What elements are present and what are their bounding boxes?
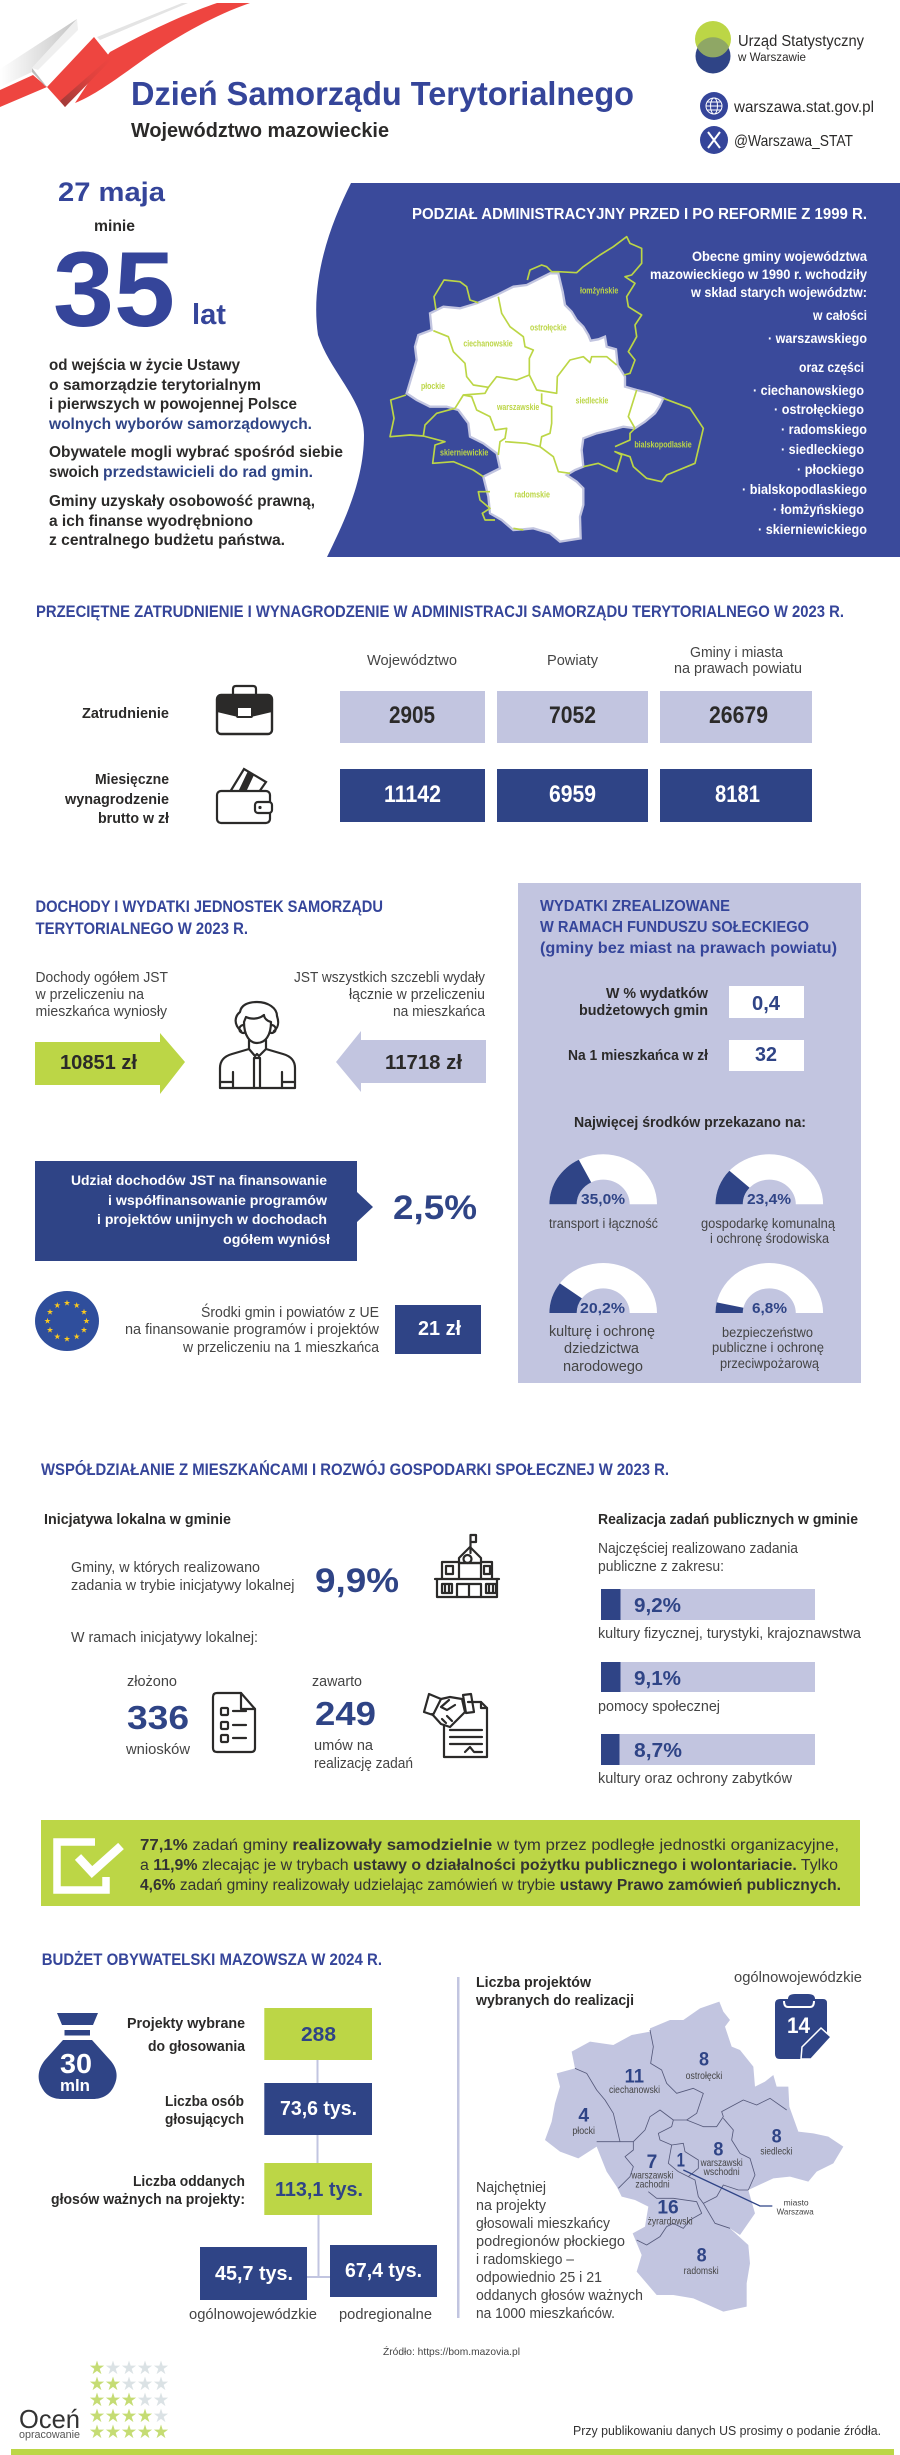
bar: culture and monuments (598, 1734, 815, 1787)
budget flow labels: Projekty wybrane (127, 2016, 245, 2032)
text: most active voters: i radomskiego – (476, 2251, 575, 2268)
map: voivodeship before and after the reform: płockie (421, 381, 445, 391)
rate this publication (19, 2360, 168, 2441)
map: projects by subregion: żyrardowski (648, 2216, 693, 2227)
value: 21 zł (395, 1305, 481, 1354)
list of former voivodeships: · bialskopodlaskiego (742, 481, 867, 497)
text: expenditure per capita (294, 970, 486, 1020)
stat: contracts: 249 (315, 1695, 376, 1732)
fund indicators: budżetowych gmin (579, 1003, 708, 1019)
intro block: 27 maja, 35 lat: 27 maja (58, 177, 166, 207)
list of former voivodeships: Obecne gminy województwa (692, 248, 867, 264)
employment table: 8181 (715, 781, 760, 808)
map: projects by subregion (545, 2002, 843, 2312)
gauge: transport (549, 1154, 658, 1231)
section heading: citizens budget: BUDŻET OBYWATELSKI MAZOWSZA W 2024 R. (42, 1950, 382, 1969)
text: most active voters: głosowali mieszkańcy (476, 2215, 610, 2232)
icon: clipboard 14: 14 (787, 2013, 811, 2038)
text: income per capita: w przeliczeniu na (35, 987, 145, 1003)
map: voivodeship before and after the reform: ostrołęckie (530, 323, 567, 333)
gauge: public safety: przeciwpożarową (720, 1356, 819, 1371)
list of former voivodeships: · ciechanowskiego (753, 382, 864, 398)
budget flow chart: 45,7 tys. (215, 2263, 293, 2285)
list of former voivodeships: · płockiego (797, 461, 864, 477)
gauge: transport: transport i łączność (549, 1216, 658, 1231)
value: 2,5%: 2,5% (393, 1189, 477, 1227)
rate this publication: Oceń (19, 2404, 80, 2434)
bar: social assistance: 9,1% (634, 1668, 681, 1690)
text: municipalities with local initiative (71, 1560, 294, 1594)
panel heading: (gminy bez miast na prawach powiatu) (540, 940, 837, 957)
budget flow labels: Liczba oddanych (133, 2174, 245, 2190)
gauge: public safety: publiczne i ochronę (712, 1340, 824, 1355)
employment table: 11142 (384, 781, 441, 808)
stat: applications (125, 1674, 191, 1758)
row labels: Miesięczne (95, 771, 169, 788)
map: projects by subregion: Warszawa (777, 2207, 814, 2217)
website contact: warszawa.stat.gov.pl (733, 99, 874, 116)
map: voivodeship before and after the reform (390, 237, 703, 542)
gauge: municipal economy: gospodarkę komunalną (701, 1216, 835, 1231)
panel: sołecki fund (518, 883, 861, 1383)
bar: physical culture: kultury fizycznej, turystyki, krajoznawstwa (598, 1626, 862, 1642)
gauge: municipal economy: 23,4% (747, 1191, 791, 1208)
intro text: i pierwszych w powojennej Polsce (49, 396, 297, 413)
map: projects by subregion: 8 (772, 2127, 782, 2148)
X contact: @Warszawa_STAT (734, 133, 853, 150)
callout: task execution (41, 1820, 860, 1906)
rate this publication: opracowanie (19, 2429, 80, 2441)
divider with projects heading (457, 1975, 634, 2318)
icon: money bag 30 mln: 30 (60, 2048, 92, 2079)
employment table: 6959 (549, 781, 596, 808)
list of former voivodeships: · ostrołęckiego (774, 401, 864, 417)
intro text (48, 357, 343, 549)
title: Dzień Samorządu Terytorialnego (131, 75, 634, 112)
row labels (64, 705, 170, 827)
intro text: z centralnego budżetu państwa. (49, 532, 285, 549)
intro text: wolnych wyborów samorządowych. (48, 416, 312, 433)
budget flow chart: 113,1 tys. (275, 2179, 363, 2201)
icon: EU flag (35, 1291, 99, 1351)
panel heading: W RAMACH FUNDUSZU SOŁECKIEGO (540, 919, 809, 936)
list of former voivodeships: · radomskiego (781, 421, 867, 437)
bar: culture and monuments: 8,7% (634, 1740, 682, 1762)
map: projects by subregion: warszawski (700, 2158, 743, 2169)
map: voivodeship before and after the reform: skierniewickie (440, 447, 488, 457)
intro block: 27 maja, 35 lat: 35 (53, 229, 175, 349)
stat: contracts: zawarto (312, 1674, 362, 1690)
section heading: income and expenditure: DOCHODY I WYDATKI JEDNOSTEK SAMORZĄDU (36, 898, 383, 916)
text: expenditure per capita: łącznie w przeliczeniu (349, 987, 485, 1003)
gauge: transport: 35,0% (581, 1191, 625, 1208)
text: income per capita (35, 970, 168, 1020)
text: municipalities with local initiative: zadania w trybie inicjatywy lokalnej (71, 1578, 294, 1594)
map: projects by subregion: ciechanowski (609, 2085, 660, 2096)
row labels: brutto w zł (98, 810, 170, 827)
budget flow chart: podregionalne (339, 2307, 432, 2323)
publication note: Przy publikowaniu danych US prosimy o podanie źródła. (573, 2423, 881, 2438)
fund indicators: 32 (755, 1044, 777, 1066)
text: income per capita: mieszkańca wyniosły (36, 1004, 168, 1020)
gauge: culture: narodowego (563, 1359, 643, 1375)
stat: contracts: realizację zadań (314, 1756, 413, 1772)
callout: task execution: 4,6% zadań gminy realizowały udzielając zamówień w trybie ustawy Prawo zamówień publicznych. (140, 1877, 841, 1894)
stat: contracts (312, 1674, 413, 1772)
icon: town hall (435, 1535, 499, 1597)
map: voivodeship before and after the reform: radomskie (514, 490, 550, 500)
map: projects by subregion: 1 (677, 2151, 685, 2172)
map: projects by subregion: 8 (699, 2050, 709, 2071)
intro block: 27 maja, 35 lat: minie (94, 218, 135, 235)
text: most active voters (476, 2179, 643, 2322)
bar: social assistance (598, 1662, 815, 1715)
bar: social assistance: pomocy społecznej (598, 1699, 720, 1715)
logo: Urząd Statystyczny: w Warszawie (737, 52, 806, 64)
list of former voivodeships: w skład starych województw: (690, 284, 867, 300)
text: most active voters: na projekty (476, 2197, 546, 2214)
section heading: income and expenditure: TERYTORIALNEGO W 2023 R. (36, 920, 248, 938)
callout: EU share: Udział dochodów JST na finansowanie (71, 1172, 327, 1188)
text: income per capita: Dochody ogółem JST (36, 970, 168, 986)
intro text: swoich (49, 464, 99, 481)
list of former voivodeships: · warszawskiego (768, 330, 867, 346)
gauge: culture: 20,2% (580, 1300, 625, 1317)
label: voivodeship-wide: ogólnowojewódzkie (734, 1970, 862, 1986)
X contact (700, 126, 853, 154)
gauge: culture: dziedzictwa (564, 1341, 640, 1357)
gauge: municipal economy (701, 1154, 835, 1246)
logo: Urząd Statystyczny: Urząd Statystyczny (738, 33, 864, 50)
map: projects by subregion: 16 (657, 2198, 679, 2219)
intro text: o samorządzie terytorialnym (49, 377, 261, 394)
intro block: 27 maja, 35 lat (53, 177, 226, 349)
gauge: public safety: 6,8% (752, 1300, 787, 1317)
arrow: expenditure (336, 1031, 486, 1092)
budget flow labels: Liczba osób (165, 2094, 244, 2110)
list of former voivodeships: mazowieckiego w 1990 r. wchodziły (650, 266, 867, 282)
map: projects by subregion: wschodni (703, 2167, 740, 2178)
icon: wallet (217, 769, 272, 823)
callout: task execution: 77,1% zadań gminy realizowały samodzielnie w tym przez podległe jednostki organizacyjne, (140, 1837, 839, 1854)
public tasks block (598, 1512, 862, 1787)
budget flow labels: głosujących (165, 2112, 244, 2128)
public tasks block: publiczne z zakresu: (598, 1559, 724, 1575)
fund indicators (568, 986, 804, 1071)
icon: person (220, 1002, 295, 1088)
map: projects by subregion: 7 (647, 2152, 657, 2173)
list of former voivodeships (650, 248, 867, 537)
subtitle: Województwo mazowieckie (131, 120, 389, 142)
map: projects by subregion: 11 (625, 2067, 644, 2088)
map: voivodeship before and after the reform: siedleckie (576, 395, 608, 405)
text: most active voters: Najchętniej (476, 2179, 546, 2196)
text: EU funds: w przeliczeniu na 1 mieszkańca (182, 1340, 380, 1356)
icon: handshake and contract (424, 1694, 487, 1757)
callout: EU share: ogółem wyniósł (223, 1231, 330, 1247)
list of former voivodeships: w całości (812, 307, 867, 323)
section heading: cooperation: WSPÓŁDZIAŁANIE Z MIESZKAŃCAMI I ROZWÓJ GOSPODARKI SPOŁECZNEJ W 2023 R. (41, 1460, 669, 1479)
budget flow chart: 73,6 tys. (280, 2098, 357, 2120)
icon: money bag 30 mln (39, 2013, 117, 2099)
website contact (700, 92, 874, 120)
flag ribbon (0, 3, 250, 107)
map: projects by subregion: radomski (684, 2266, 719, 2277)
row labels: wynagrodzenie (64, 791, 169, 808)
gauge: municipal economy: i ochronę środowiska (710, 1231, 829, 1246)
list of former voivodeships: · łomżyńskiego (773, 501, 864, 517)
map: voivodeship before and after the reform: bialskopodlaskie (634, 439, 692, 449)
footer bar (11, 2449, 894, 2455)
table column headers: Powiaty (547, 652, 598, 669)
subheading: local initiative: Inicjatywa lokalna w gminie (44, 1512, 231, 1528)
gauge: culture (549, 1263, 657, 1375)
text: expenditure per capita: na mieszkańca (393, 1004, 486, 1020)
icon: briefcase (217, 686, 272, 734)
budget flow labels (51, 2016, 246, 2208)
arrow: income (35, 1033, 185, 1094)
intro text: Gminy uzyskały osobowość prawną, (49, 493, 315, 510)
gauge: culture: kulturę i ochronę (549, 1324, 655, 1340)
stat: applications: złożono (127, 1674, 177, 1690)
stat: applications: 336 (127, 1699, 189, 1736)
table column headers: Gminy i miasta (690, 644, 784, 661)
text: EU funds: na finansowanie programów i projektów (125, 1322, 380, 1338)
text: most active voters: oddanych głosów ważnych (476, 2287, 643, 2304)
budget flow chart: 67,4 tys. (345, 2260, 422, 2282)
stat: contracts: umów na (314, 1738, 374, 1754)
list of former voivodeships: · siedleckiego (781, 441, 864, 457)
icon: check mark (57, 1842, 121, 1890)
arrow: income: 10851 zł (60, 1052, 137, 1074)
text: within local initiative: W ramach inicjatywy lokalnej: (71, 1630, 258, 1646)
employment table: 26679 (709, 702, 768, 729)
gauge: public safety: bezpieczeństwo (722, 1325, 813, 1340)
map: projects by subregion: ostrołęcki (686, 2071, 722, 2082)
text: most active voters: na 1000 mieszkańców. (476, 2305, 615, 2322)
table column headers: Województwo (367, 652, 457, 669)
fund indicators: Na 1 mieszkańca w zł (568, 1048, 708, 1064)
map: projects by subregion: 8 (697, 2246, 707, 2267)
divider with projects heading: Liczba projektów (476, 1975, 592, 1991)
divider with projects heading: wybranych do realizacji (475, 1993, 634, 2009)
budget flow chart: ogólnowojewódzkie (189, 2307, 317, 2323)
map: projects by subregion: zachodni (635, 2180, 670, 2191)
logo: Urząd Statystyczny (695, 21, 864, 74)
budget flow labels: głosów ważnych na projekty: (51, 2192, 245, 2208)
gauge: public safety (712, 1263, 824, 1371)
panel heading: PODZIAŁ ADMINISTRACYJNY PRZED I PO REFORMIE Z 1999 R. (412, 206, 867, 223)
intro text: przedstawicieli do rad gmin. (103, 464, 313, 481)
fund indicators: 0,4 (752, 993, 781, 1015)
text: most active voters: odpowiednio 25 i 21 (476, 2269, 602, 2286)
icon: money bag 30 mln: mln (60, 2076, 90, 2095)
budget flow labels: do głosowania (148, 2039, 246, 2055)
employment table: 2905 (389, 702, 435, 729)
text: municipalities with local initiative: Gminy, w których realizowano (71, 1560, 260, 1576)
text: expenditure per capita: JST wszystkich szczebli wydały (294, 970, 486, 986)
intro text: od wejścia w życie Ustawy (49, 357, 240, 374)
icon: clipboard 14 (775, 1994, 831, 2059)
employment table (340, 691, 812, 822)
bar: physical culture (598, 1589, 862, 1642)
map: projects by subregion: 8 (713, 2140, 724, 2161)
list of former voivodeships: · skierniewickiego (758, 521, 867, 537)
text: EU funds: Środki gmin i powiatów z UE (201, 1303, 379, 1321)
bar: culture and monuments: kultury oraz ochrony zabytków (598, 1771, 793, 1787)
callout: EU share: i współfinansowanie programów (108, 1192, 327, 1208)
section heading: income and expenditure (36, 898, 383, 938)
map: voivodeship before and after the reform: warszawskie (496, 402, 539, 412)
map: projects by subregion: 4 (578, 2106, 589, 2127)
subheading: Najwięcej środków przekazano na: (574, 1115, 806, 1131)
map: projects by subregion: warszawski (630, 2171, 673, 2182)
fund indicators: W % wydatków (606, 986, 709, 1002)
callout: EU share: i projektów unijnych w dochodach (97, 1211, 327, 1227)
arrow: expenditure: 11718 zł (385, 1052, 462, 1074)
panel: administrative division (316, 183, 900, 557)
value: 21 zł: 21 zł (418, 1318, 461, 1340)
budget flow chart: 288 (301, 2024, 336, 2046)
list of former voivodeships: oraz części (799, 359, 864, 375)
table column headers: na prawach powiatu (674, 660, 802, 677)
panel heading: WYDATKI ZREALIZOWANE (540, 898, 730, 915)
icon: document checklist (213, 1693, 255, 1752)
callout: task execution: a 11,9% zlecając je w trybach ustawy o działalności pożytku publicznego i wolontariacie. Tylko (140, 1857, 838, 1874)
intro block: 27 maja, 35 lat: lat (192, 299, 226, 331)
intro text: a ich finanse wyodrębniono (49, 513, 253, 530)
map: projects by subregion: siedlecki (760, 2146, 792, 2157)
map: voivodeship before and after the reform: ciechanowskie (463, 339, 513, 349)
budget flow chart (189, 2008, 437, 2323)
public tasks block: Realizacja zadań publicznych w gminie (598, 1512, 858, 1528)
map: projects by subregion: płocki (572, 2126, 595, 2137)
panel heading (540, 898, 837, 957)
callout: EU share (35, 1161, 373, 1261)
map: voivodeship before and after the reform: łomżyńskie (580, 286, 618, 296)
employment table: 7052 (549, 702, 596, 729)
map: projects by subregion: miasto (784, 2198, 809, 2208)
bar: physical culture: 9,2% (634, 1595, 681, 1617)
source: Źródło: https://bom.mazovia.pl (383, 2345, 520, 2358)
table column headers (367, 644, 802, 677)
row labels: Zatrudnienie (82, 705, 169, 722)
text: EU funds (125, 1303, 380, 1356)
value: 9,9%: 9,9% (315, 1562, 399, 1600)
intro text: Obywatele mogli wybrać spośród siebie (49, 444, 343, 461)
public tasks block: Najczęściej realizowano zadania (598, 1541, 799, 1557)
text: most active voters: podregionów płockiego (476, 2233, 625, 2250)
stat: applications: wniosków (125, 1742, 191, 1758)
